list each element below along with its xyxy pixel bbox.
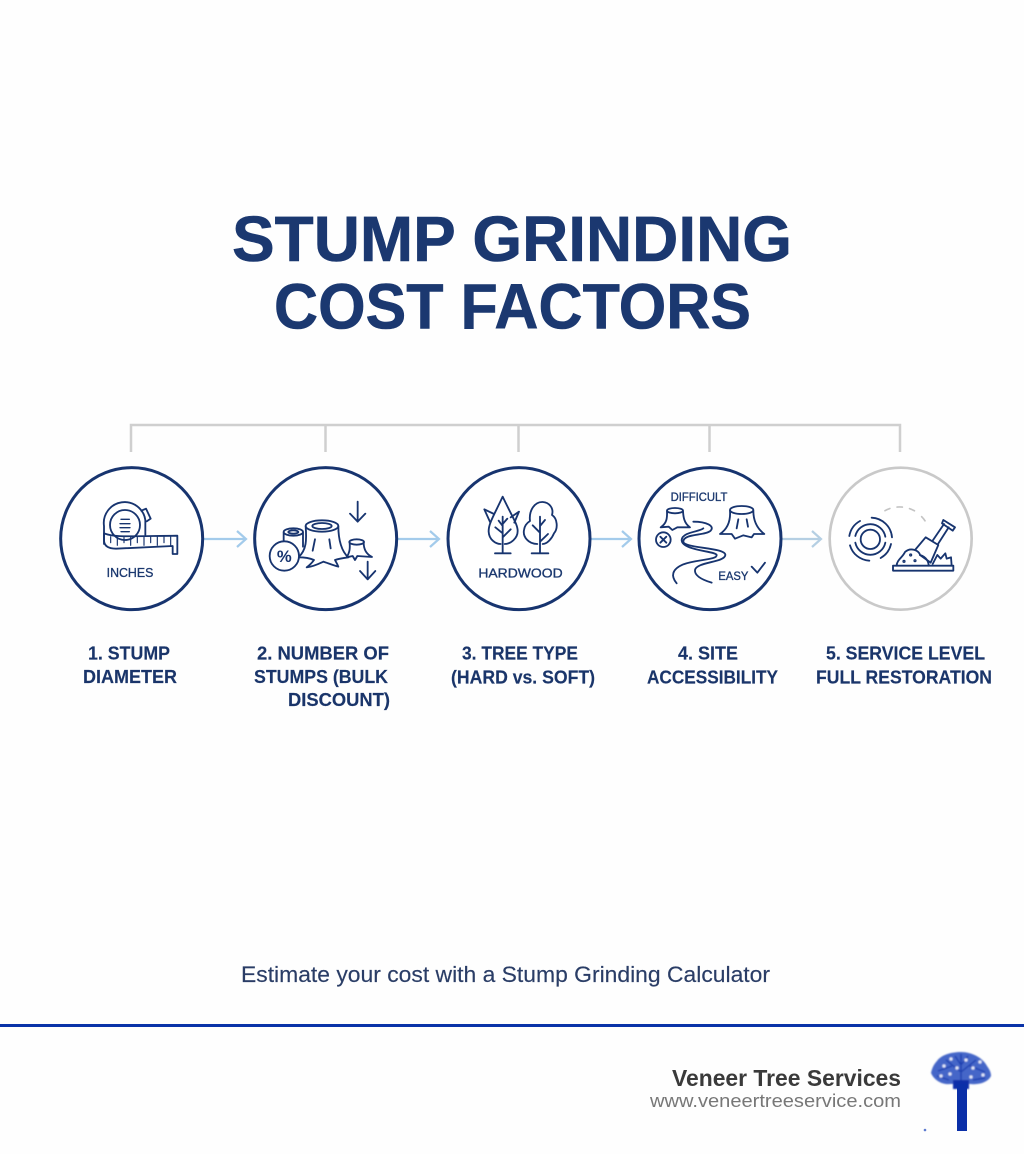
footer rule — [0, 1024, 1024, 1027]
logo: tree — [924, 1052, 991, 1131]
label: step 5 — [816, 644, 992, 688]
label: step 1 — [83, 644, 177, 687]
icon label: easy: EASY — [718, 569, 748, 583]
percent sign: % — [277, 547, 292, 566]
circle: tree type — [448, 468, 590, 610]
arrow: step 2 to 3 — [398, 531, 439, 547]
footer url: www.veneertreeservice.com — [649, 1090, 901, 1111]
label: step 5: FULL RESTORATION — [816, 668, 992, 688]
label: step 3 — [451, 644, 595, 688]
icon: ground rings — [849, 518, 892, 561]
circle: stump diameter — [61, 468, 203, 610]
icon: stumps with discount — [270, 502, 375, 579]
label: step 4 — [647, 644, 778, 688]
label: step 1: DIAMETER — [83, 667, 177, 687]
label: step 3: (HARD vs. SOFT) — [451, 668, 595, 688]
footer brand name: Veneer Tree Services — [672, 1065, 901, 1091]
icon: tape measure — [104, 502, 177, 554]
arrow: step 3 to 4 — [591, 531, 631, 547]
label: step 2: 2. NUMBER OF — [257, 644, 389, 664]
icon: stumps and winding path — [656, 506, 765, 583]
label: step 4: ACCESSIBILITY — [647, 668, 778, 688]
label: step 2: DISCOUNT) — [288, 690, 390, 710]
title — [232, 203, 792, 342]
label: step 4: 4. SITE — [678, 644, 738, 664]
arrow: step 4 to 5 — [782, 531, 821, 547]
label: step 3: 3. TREE TYPE — [462, 644, 578, 664]
bracket connector — [131, 425, 900, 452]
label: step 2: STUMPS (BULK — [254, 667, 388, 687]
label: step 1: 1. STUMP — [88, 644, 170, 664]
title: COST FACTORS — [274, 270, 751, 342]
icon label: inches: INCHES — [107, 565, 153, 580]
circle: number of stumps — [255, 468, 397, 610]
circle: service level — [830, 468, 972, 610]
label: step 2 — [254, 644, 390, 710]
circle: site accessibility — [639, 468, 781, 610]
icon: dashed arc — [885, 507, 927, 525]
calculator note: Estimate your cost with a Stump Grinding Calculator — [241, 962, 771, 987]
icon: two trees — [484, 497, 557, 553]
icon: shovel and soil — [893, 520, 955, 571]
arrow: step 1 to 2 — [204, 531, 246, 547]
label: step 5: 5. SERVICE LEVEL — [826, 644, 985, 664]
icon label: hardwood: HARDWOOD — [478, 566, 563, 581]
icon label: difficult: DIFFICULT — [671, 490, 728, 504]
title: STUMP GRINDING — [232, 203, 792, 275]
